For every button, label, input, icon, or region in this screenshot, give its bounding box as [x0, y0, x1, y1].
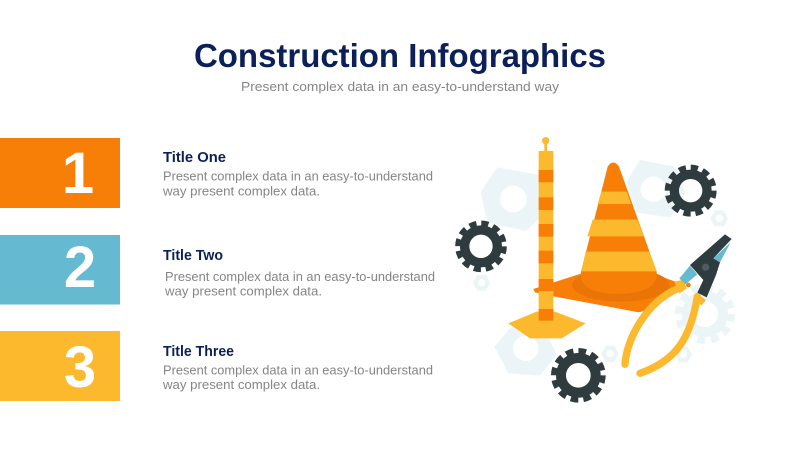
item 1 number panel: [0, 138, 120, 208]
item 1 text: Title One: [163, 150, 226, 166]
item 2 number panel: [0, 235, 120, 304]
gear top right: [668, 168, 714, 214]
item 3 number panel: [0, 331, 120, 401]
pliers: [625, 234, 732, 373]
item 2 number panel: 2: [64, 235, 96, 300]
gear bottom: [554, 351, 603, 400]
striped pole: [508, 137, 586, 338]
pale background nuts and gear: [473, 160, 731, 376]
illustration: construction tools: [458, 137, 732, 400]
item 2 text: [163, 248, 435, 298]
item 3 text: [162, 344, 433, 392]
title: Construction Infographics: [194, 37, 606, 74]
item 1 text: [162, 150, 433, 198]
item 1 text: Present complex data in an easy-to-understand: [163, 170, 433, 184]
item 1 number panel: 1: [62, 141, 94, 206]
traffic cone: [533, 162, 685, 312]
subtitle: Present complex data in an easy-to-understand way: [241, 79, 560, 94]
item 2 text: Title Two: [163, 248, 223, 264]
item 3 number panel: 3: [64, 335, 96, 400]
item 3 text: Present complex data in an easy-to-understand: [163, 364, 433, 378]
gear left: [458, 223, 504, 269]
item 3 text: Title Three: [163, 344, 234, 360]
item 2 text: Present complex data in an easy-to-understand: [165, 270, 435, 284]
item 3 text: way present complex data.: [162, 378, 320, 392]
item 2 text: way present complex data.: [164, 284, 322, 298]
item 1 text: way present complex data.: [162, 184, 320, 198]
